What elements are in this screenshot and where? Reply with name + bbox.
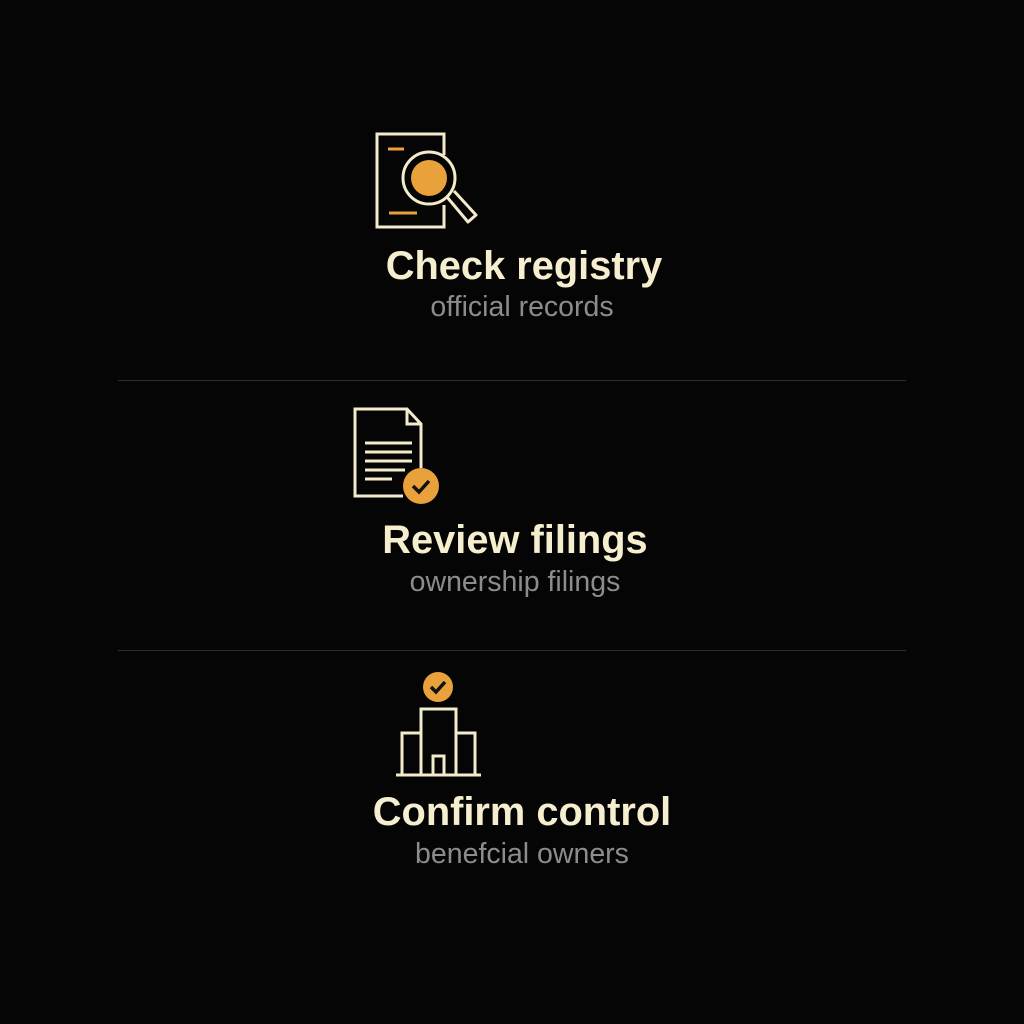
heading: Check registry: Check registry [386, 244, 662, 288]
subtitle: benefcial owners: benefcial owners [415, 838, 629, 870]
icon: document with magnifier [377, 134, 476, 227]
heading: Review filings: Review filings [382, 518, 648, 562]
heading: Confirm control: Confirm control [373, 790, 671, 834]
icon: filing document with check [355, 409, 439, 504]
subtitle: official records: official records [430, 291, 614, 323]
subtitle: ownership filings: ownership filings [410, 566, 620, 598]
icon: building with check [396, 672, 481, 775]
